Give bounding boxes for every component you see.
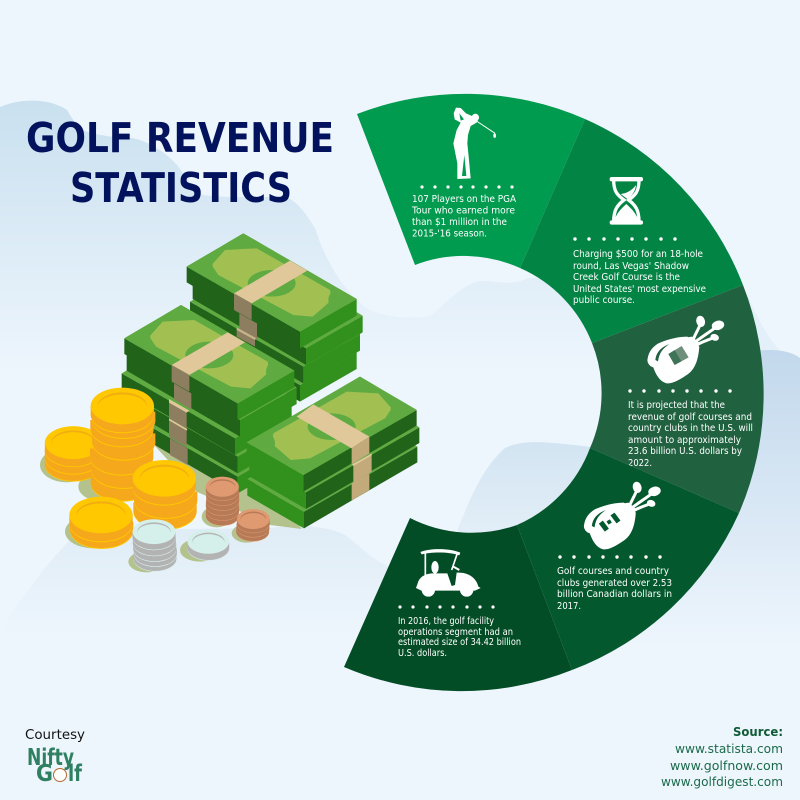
title <box>26 114 334 212</box>
text: than $1 million in the <box>412 217 507 228</box>
money stack: front <box>245 372 419 528</box>
coin shadows <box>40 448 262 572</box>
title: STATISTICS <box>70 164 292 212</box>
text <box>411 194 516 240</box>
copper stack: short <box>236 509 270 542</box>
text: 107 Players on the PGA <box>412 194 516 205</box>
silver stack: short <box>187 530 229 561</box>
text: revenue of golf courses and <box>628 412 752 423</box>
panel: U.S. revenue projection wedge <box>590 285 764 513</box>
gold stack: left <box>45 426 102 482</box>
text: amount to approximately <box>628 435 741 446</box>
source list: www.statista.com <box>675 741 783 756</box>
ground shadow <box>155 446 302 529</box>
text: 2017. <box>557 601 581 612</box>
icon: golf cart <box>416 549 481 597</box>
text <box>573 249 706 306</box>
dots <box>628 389 732 393</box>
text: It is projected that the <box>628 400 725 411</box>
icon: golf bag with Canadian flag <box>584 481 662 549</box>
gold stack: front right <box>133 460 197 530</box>
text: United States' most expensive <box>573 284 706 295</box>
gold stack: front left <box>69 497 133 549</box>
dots <box>420 185 514 189</box>
text: Charging $500 for an 18-hole <box>573 249 703 260</box>
courtesy logo: Courtesy <box>25 728 85 743</box>
panel: PGA players wedge <box>357 94 585 268</box>
icon: hourglass <box>610 177 643 225</box>
text: clubs generated over 2.53 <box>557 578 672 589</box>
text <box>628 400 753 469</box>
gold stack: tall <box>90 388 155 502</box>
dots <box>558 555 662 559</box>
courtesy logo: lf <box>68 761 83 787</box>
panel: facility operations wedge <box>344 518 572 691</box>
dots <box>573 237 677 241</box>
illustration: money stacks and coins <box>40 228 419 572</box>
title: GOLF REVENUE <box>26 114 334 162</box>
icon: golfer <box>453 108 496 179</box>
icon: golf bag with US flag <box>647 315 725 383</box>
text: round, Las Vegas' Shadow <box>573 261 689 272</box>
text: In 2016, the golf facility <box>398 616 494 627</box>
panel: Shadow Creek wedge <box>520 119 743 343</box>
source list <box>661 724 783 789</box>
dots <box>398 605 495 609</box>
panel: Canada revenue wedge <box>517 448 739 670</box>
text: public course. <box>573 295 635 306</box>
text: billion Canadian dollars in <box>557 589 672 600</box>
courtesy logo: G <box>36 761 53 787</box>
text <box>398 616 521 659</box>
money stack: middle <box>122 300 297 493</box>
silver stack: tall <box>132 519 177 572</box>
text: estimated size of 34.42 billion <box>398 637 521 648</box>
text: 23.6 billion U.S. dollars by <box>628 446 742 457</box>
courtesy logo <box>25 728 85 787</box>
source list: www.golfdigest.com <box>661 774 783 789</box>
courtesy logo: Nifty <box>27 745 74 771</box>
text: Creek Golf Course is the <box>573 272 680 283</box>
text: Golf courses and country <box>557 566 669 577</box>
text: 2022. <box>628 458 652 469</box>
text: 2015-'16 season. <box>412 228 487 240</box>
text: operations segment had an <box>398 627 513 638</box>
money stack: back <box>187 228 363 402</box>
copper stack: tall <box>206 477 239 526</box>
source list: www.golfnow.com <box>670 758 783 773</box>
text: U.S. dollars. <box>398 648 447 659</box>
source list: Source: <box>733 724 783 739</box>
text: country clubs in the U.S. will <box>628 423 753 434</box>
text: Tour who earned more <box>411 206 515 216</box>
text <box>557 566 672 612</box>
